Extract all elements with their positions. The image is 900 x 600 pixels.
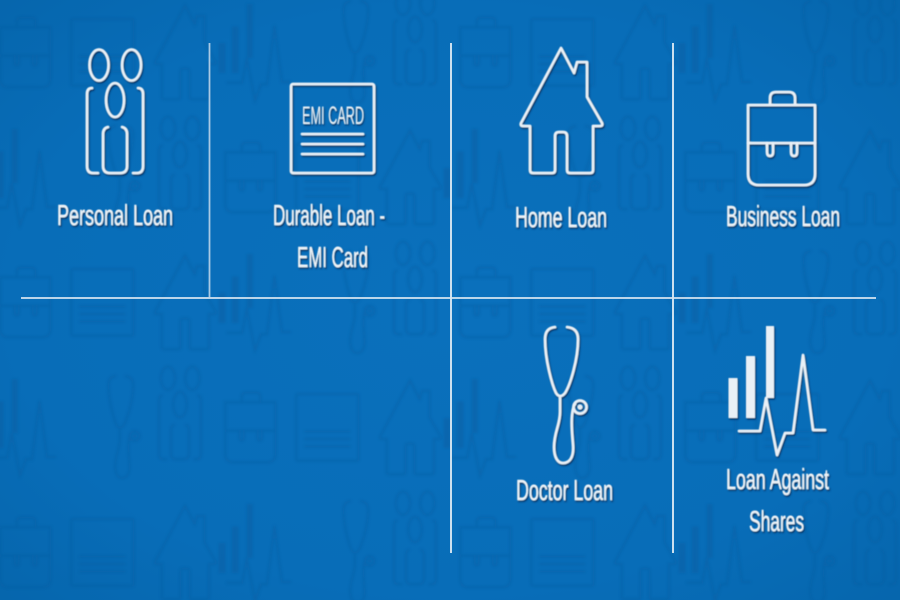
label: Durable Loan - EMI Card: Durable Loan - [273,200,385,232]
icon text: EMI CARD: EMI CARD [302,102,364,130]
icon: stethoscope [545,327,586,463]
icon: bars and pulse line [733,326,825,455]
label: Durable Loan - EMI Card: EMI Card [297,242,368,274]
label: Durable Loan - EMI Card [273,200,385,274]
panel: loan against shares [726,326,829,538]
icon: EMI card [291,84,374,173]
icon: briefcase [748,92,815,185]
label: Loan Against Shares [726,464,829,538]
label: Loan Against Shares: Loan Against [726,464,829,496]
panel: doctor loan [516,327,613,507]
label: Home Loan: Home Loan [515,202,607,234]
icon: house [521,48,602,173]
label: Personal Loan: Personal Loan [57,200,173,232]
icon: three people [87,50,143,173]
panel: home loan [515,48,607,234]
panel: business loan [726,92,840,233]
panel: personal loan [57,50,173,232]
label: Loan Against Shares: Shares [749,506,804,538]
panel: durable loan EMI card [273,84,385,274]
label: Doctor Loan: Doctor Loan [516,475,613,507]
